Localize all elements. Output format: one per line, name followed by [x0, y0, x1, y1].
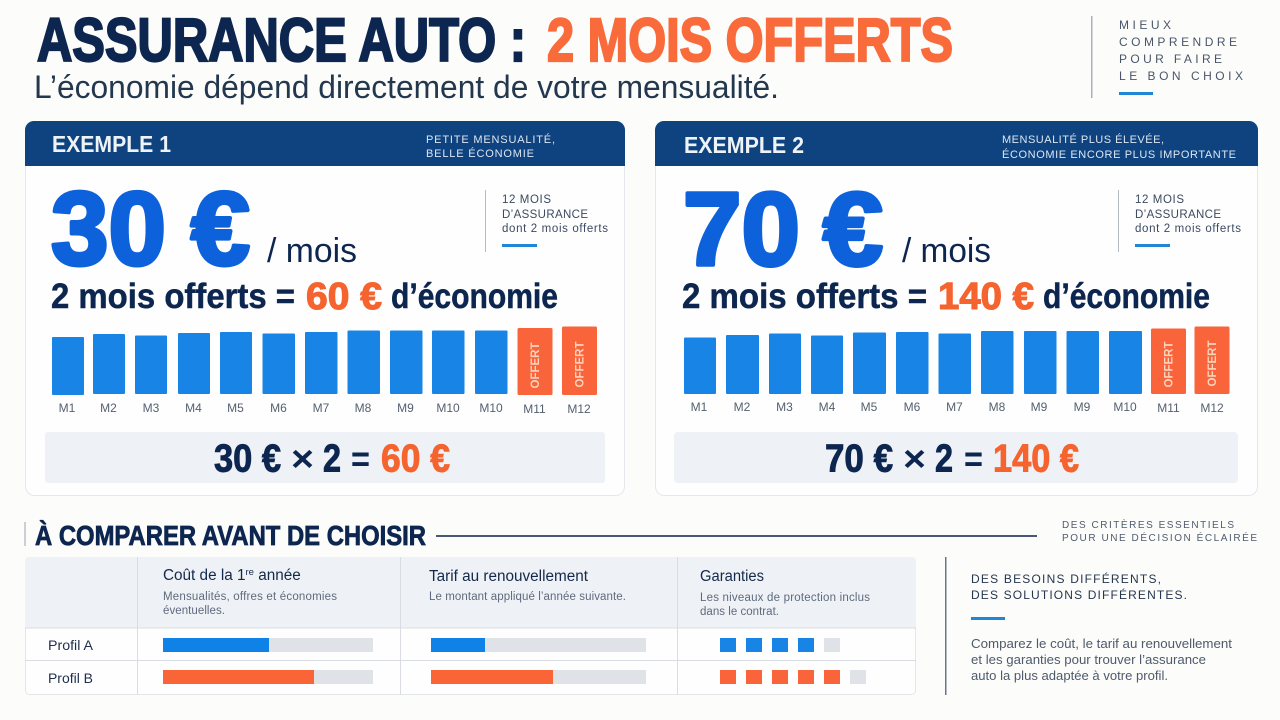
title: 2 MOIS OFFERTS: [547, 6, 953, 74]
tagline block: MIEUX: [1119, 18, 1171, 32]
formula box: 60 €: [381, 438, 450, 480]
big price: €: [823, 172, 883, 288]
bar chart: 12 mois: M4: [185, 401, 202, 415]
row: profil A: [48, 637, 840, 653]
bar chart: 12 mois: M10: [479, 401, 503, 415]
formula box: 30 €: [214, 438, 281, 480]
formula box: [674, 432, 1238, 483]
column: coût: éventuelles.: [163, 605, 225, 617]
bar chart: 12 mois: M10: [436, 401, 460, 415]
bar chart: 12 mois: M3: [143, 401, 160, 415]
column: garanties: Garanties: [700, 568, 764, 585]
section note: [1062, 518, 1257, 544]
card note: PETITE MENSUALITÉ,: [426, 133, 555, 146]
bar chart: 12 mois: M4: [819, 400, 836, 414]
card note: ÉCONOMIE ENCORE PLUS IMPORTANTE: [1002, 148, 1236, 161]
conclusion panel: [945, 557, 1232, 695]
side note: dont 2 mois offerts: [502, 223, 608, 235]
formula box: 140 €: [993, 438, 1079, 480]
conclusion text: auto la plus adaptée à votre profil.: [971, 668, 1168, 683]
bar chart: 12 mois: M6: [270, 401, 287, 415]
big price: 30: [51, 172, 166, 288]
bar chart: 12 mois: M11: [523, 402, 546, 416]
side note: dont 2 mois offerts: [1135, 223, 1241, 235]
formula box: ×: [903, 438, 926, 479]
savings line: 140 €: [938, 276, 1034, 318]
bar chart: 12 mois: M7: [313, 401, 330, 415]
row: profil A: Profil A: [48, 637, 94, 653]
column: coût: année: [254, 567, 301, 584]
panel: exemple 2: [655, 121, 1258, 496]
tagline block: COMPRENDRE: [1119, 35, 1237, 49]
column: tarif: Le montant appliqué l’année suivante.: [429, 591, 626, 603]
formula box: =: [964, 438, 983, 479]
bar chart: 12 mois: M3: [776, 400, 793, 414]
bar chart: 12 mois: M9: [1031, 400, 1048, 414]
card note: [1002, 133, 1236, 161]
column: coût: re: [246, 567, 254, 578]
card header: [655, 121, 1258, 166]
savings line: 60 €: [306, 276, 382, 318]
conclusion text: Comparez le coût, le tarif au renouvellement: [971, 636, 1232, 651]
savings line: [682, 276, 1210, 318]
conclusion text: [971, 636, 1232, 683]
side note: [1118, 190, 1241, 252]
bar chart: 12 mois: M6: [904, 400, 921, 414]
side note: 12 MOIS: [502, 194, 551, 206]
bar chart: 12 mois: OFFERT: [574, 342, 586, 388]
bar chart: 12 mois: M12: [1200, 401, 1224, 415]
section heading: À COMPARER AVANT DE CHOISIR: [35, 520, 426, 551]
bar chart: 12 mois: OFFERT: [1164, 342, 1176, 388]
bar chart: 12 mois: M8: [355, 401, 372, 415]
formula box: =: [351, 438, 370, 479]
bar chart: 12 mois: [52, 326, 597, 416]
section note: POUR UNE DÉCISION ÉCLAIRÉE: [1062, 531, 1257, 544]
comparison table: [25, 557, 916, 695]
bar chart: 12 mois: M8: [989, 400, 1006, 414]
section note: DES CRITÈRES ESSENTIELS: [1062, 518, 1234, 531]
card header: [25, 121, 625, 166]
column: tarif: [429, 568, 626, 603]
tagline block: LE BON CHOIX: [1119, 69, 1243, 83]
bar chart: 12 mois: M1: [59, 401, 76, 415]
per month: / mois: [902, 232, 991, 270]
table header row: [25, 557, 916, 628]
side note: D’ASSURANCE: [502, 209, 588, 221]
title: ASSURANCE AUTO :: [37, 6, 526, 74]
big price: [51, 172, 250, 288]
bar chart: 12 mois: OFFERT: [1207, 340, 1219, 386]
column: garanties: [700, 568, 870, 618]
savings line: [51, 276, 558, 318]
formula box: 2: [323, 438, 341, 480]
conclusion heading: DES BESOINS DIFFÉRENTS,: [971, 571, 1161, 586]
conclusion heading: DES SOLUTIONS DIFFÉRENTES.: [971, 587, 1187, 602]
formula box: [45, 432, 605, 483]
formula box: 2: [935, 438, 953, 480]
column: garanties: dans le contrat.: [700, 606, 779, 618]
formula box: ×: [291, 438, 314, 479]
title: [37, 6, 953, 74]
bar chart: 12 mois: OFFERT: [530, 342, 542, 388]
big price: €: [191, 172, 250, 288]
savings line: d’économie: [1043, 277, 1210, 316]
side note: [485, 190, 608, 252]
bar chart: 12 mois: M9: [1074, 400, 1091, 414]
savings line: 2 mois offerts =: [51, 277, 295, 316]
formula box: 70 €: [825, 438, 893, 480]
savings line: d’économie: [391, 277, 558, 316]
bar chart: 12 mois: M11: [1157, 401, 1180, 415]
bar chart: 12 mois: M2: [734, 400, 751, 414]
card note: [426, 133, 555, 160]
column: coût: Mensualités, offres et économies: [163, 591, 337, 603]
card note: BELLE ÉCONOMIE: [426, 147, 534, 160]
bar chart: 12 mois: M2: [100, 401, 117, 415]
column: garanties: Les niveaux de protection inclus: [700, 592, 870, 604]
bar chart: 12 mois: M1: [691, 400, 708, 414]
side note: D’ASSURANCE: [1135, 209, 1221, 221]
row: profil B: [48, 670, 866, 686]
card label: EXEMPLE 1: [52, 131, 171, 157]
card note: MENSUALITÉ PLUS ÉLEVÉE,: [1002, 133, 1164, 146]
panel: exemple 1: [25, 121, 625, 496]
bar chart: 12 mois: M7: [946, 400, 963, 414]
bar chart: 12 mois: [684, 326, 1230, 415]
bar chart: 12 mois: M9: [397, 401, 414, 415]
subtitle: L’économie dépend directement de votre mensualité.: [34, 69, 779, 105]
bar chart: 12 mois: M5: [861, 400, 878, 414]
savings line: 2 mois offerts =: [682, 277, 927, 316]
accent rule: [971, 617, 1005, 620]
conclusion heading: [971, 571, 1187, 602]
column: tarif: Tarif au renouvellement: [429, 568, 589, 585]
side note: 12 MOIS: [1135, 194, 1184, 206]
big price: 70: [683, 172, 800, 288]
per month: / mois: [267, 232, 357, 270]
bar chart: 12 mois: M10: [1113, 400, 1137, 414]
conclusion text: et les garanties pour trouver l’assurance: [971, 652, 1206, 667]
big price: [683, 172, 883, 288]
bar chart: 12 mois: M12: [567, 402, 591, 416]
tagline block: POUR FAIRE: [1119, 52, 1222, 66]
tagline block: [1091, 16, 1243, 98]
row: profil B: Profil B: [48, 670, 93, 686]
bar chart: 12 mois: M5: [227, 401, 244, 415]
card label: EXEMPLE 2: [684, 132, 804, 158]
column: coût: [163, 567, 337, 617]
column: coût: Coût de la 1: [163, 567, 246, 584]
